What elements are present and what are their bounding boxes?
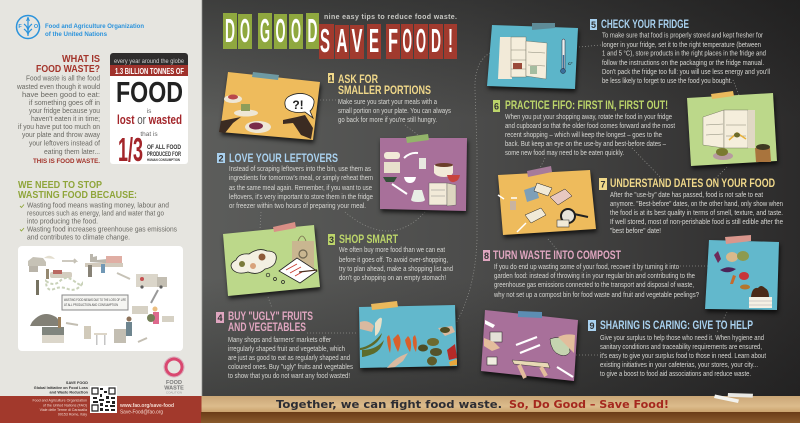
FAO logo and name: A (26, 17, 30, 23)
tip 3: don't go shopping on an empty stomach! (339, 275, 446, 282)
factory scene (85, 254, 130, 279)
FAO logo and name: of the United Nations (45, 31, 108, 38)
tip 4: Many shops and farmers' markets offer (228, 337, 332, 344)
tip 7: After the "use-by" date has passed, food is not safe to eat (610, 192, 763, 199)
bullet list: resources such as energy, land and water that go (27, 210, 164, 218)
heading: what is food waste: FOOD WASTE? (36, 64, 100, 75)
definition text: wasted even though it would (16, 84, 100, 91)
definition text: your plate and throw away (22, 132, 100, 139)
tip 1: SMALLER PORTIONS (338, 85, 431, 97)
tip 9: existing initiatives in your cafeterias, your stores, your city... (600, 362, 758, 369)
title: save food: A (336, 22, 348, 59)
message box: WASTING FOOD MEANS DUE TO THE LOSS OF LIFE (64, 298, 126, 302)
save food initiative text (34, 381, 89, 394)
shopping bag (292, 236, 314, 268)
save food initiative text: SAVE FOOD (66, 381, 88, 385)
definition text: eating them later... (44, 149, 100, 156)
open fridge (429, 183, 456, 206)
thermometer: C° (568, 61, 573, 66)
bullet list (20, 202, 177, 242)
bullet list: into producing the food. (27, 218, 98, 226)
definition text: haven't eaten it in time; (31, 116, 100, 123)
truck (136, 274, 167, 303)
tip 8: garden food: instead of throwing it in your regular bin and contributing to the (494, 273, 695, 280)
definition text: if something goes off in (29, 100, 100, 107)
tip 3: We often buy more food than we can eat (339, 247, 445, 254)
tip 2: or freezer within two hours of preparing your meal. (229, 203, 366, 210)
disposal scene (30, 314, 107, 345)
message box: AT ALL PRODUCTION AND CONSUMPTION (64, 303, 118, 307)
text: D (308, 12, 318, 49)
tip 2: LOVE YOUR LEFTOVERS (229, 153, 338, 165)
leftover items (383, 152, 460, 202)
tip 6: some new food may need to be eaten quickly. (505, 150, 624, 157)
hands (219, 115, 313, 139)
green heading: WASTING FOOD BECAUSE: (18, 190, 137, 201)
tip 2: Instead of scraping leftovers into the bin, use them as (229, 166, 371, 173)
tip 5: CHECK YOUR FRIDGE (601, 19, 689, 31)
tip 8: 8 (484, 251, 489, 261)
tip 7: 7 (600, 180, 606, 190)
tip 4: 4 (217, 313, 223, 323)
address: of the United Nations (FAO) (43, 404, 87, 408)
tip 9: SHARING IS CARING: GIVE TO HELP (600, 320, 753, 332)
title: do good (223, 12, 319, 49)
thought cloud (231, 250, 284, 284)
tip 2: 2 (218, 154, 224, 164)
statistic card: PRODUCED FOR (147, 152, 181, 158)
panel 3: shopping list (223, 222, 320, 296)
title: do good: D (225, 12, 235, 49)
FAO logo and name: F (18, 24, 22, 30)
open fridge (498, 37, 547, 79)
farm scene (28, 256, 82, 295)
wooden shelf (200, 396, 800, 423)
tip 9: Give your surplus to help those who need it. When hygiene and (600, 335, 764, 342)
panel 2: leftovers (380, 134, 467, 211)
panel 4: ugly vegetables (359, 301, 457, 368)
tip 8: TURN WASTE INTO COMPOST (493, 250, 621, 262)
address: Viale delle Terme di Caracalla (40, 408, 87, 412)
tip 5: longer in your fridge, set it to the right temperature (between (602, 42, 761, 49)
closing message: Together, we can fight food waste. (276, 398, 502, 411)
address (32, 398, 87, 416)
closing message: So, Do Good – Save Food! (509, 398, 669, 411)
labels and magnifier (498, 183, 588, 232)
heading: what is food waste (36, 54, 100, 75)
tip 6: and cupboard so that the older food comes forward and the most (505, 123, 675, 130)
green heading: WE NEED TO STOP (18, 180, 102, 191)
food chain illustration panel (18, 246, 183, 351)
statistic card: HUMAN CONSUMPTION (147, 158, 180, 162)
tip 5: 5 (591, 20, 596, 30)
definition text (16, 76, 100, 165)
title: save food: S (320, 22, 330, 59)
tip 6: PRACTICE FIFO: FIRST IN, FIRST OUT! (505, 100, 668, 112)
statistic card: 1/3 (118, 131, 143, 168)
bullet list: and contributes to climate change. (27, 234, 130, 242)
tip 8: why not set up a compost bin for food waste and fruit and vegetable peelings? (493, 292, 699, 299)
tip 3 (328, 234, 453, 282)
definition text: have been good to eat: (22, 92, 100, 99)
title: save food (319, 22, 457, 59)
sidebar background (0, 0, 201, 423)
save food initiative text: Global Initiative on Food Loss (34, 386, 88, 390)
address: 00153 Rome, Italy (58, 412, 87, 416)
definition text: your fridge because you (29, 108, 100, 115)
title: save food: O (416, 22, 426, 59)
title: save food: E (369, 22, 379, 59)
tip 4 (216, 311, 353, 380)
subtitle: nine easy tips to reduce food waste. (324, 14, 457, 21)
coalition logo: FOOD (166, 380, 182, 386)
vegetables (360, 318, 457, 368)
tip 5: follow the instructions on the packaging or the fridge manual. (602, 60, 764, 67)
panel 9: sharing food (481, 310, 578, 381)
plates (224, 94, 271, 133)
panel 6: FIFO fridge (687, 91, 777, 166)
contact: www.fao.org/save-food (119, 403, 174, 409)
tip 1: small portion on your plate. You can always (338, 108, 451, 115)
tip 7 (599, 178, 783, 235)
tip 6: 6 (494, 102, 499, 112)
tip 4: irregularly shaped fruit and vegetable, which (228, 346, 345, 353)
contact (119, 403, 174, 416)
footer band (0, 396, 201, 423)
title: save food: O (402, 22, 412, 59)
tip 5: be less likely to forget to use the food you bought. (602, 78, 732, 85)
notepad (279, 258, 317, 283)
tip 4: coloured ones. Buy "ugly" fruits and vegetables (228, 364, 353, 371)
connector dotted lines (260, 45, 739, 355)
statistic card: OF ALL FOOD (147, 144, 181, 151)
statistic card: FOOD (116, 77, 183, 109)
definition text: Food waste is all the food (26, 76, 100, 82)
address: Food and Agriculture Organization (32, 398, 87, 402)
tip 5 (590, 19, 770, 85)
food scraps and crate (714, 251, 772, 308)
statistic card: is (147, 108, 152, 115)
green heading (18, 180, 137, 201)
panel 5: fridge and thermometer (487, 23, 578, 89)
statistic card: 1.3 BILLION TONNES OF (115, 67, 184, 76)
tip 9 (588, 320, 766, 378)
statistic card (110, 53, 188, 168)
coalition logo: WASTE (164, 386, 184, 392)
tip 3: try to plan ahead, make a shopping list and (339, 266, 453, 273)
FAO logo and name (16, 16, 144, 38)
panel 1: plates and hands (219, 72, 320, 140)
tip 9: 9 (589, 321, 595, 331)
fridge with food (703, 110, 771, 162)
title: do good: G (260, 12, 270, 49)
title: save food: ! (448, 22, 453, 59)
tip 3: before it goes off. To avoid over-shopping, (339, 257, 448, 264)
title: save food: D (431, 22, 441, 59)
tip 1: ASK FOR (338, 74, 379, 86)
tip 4: AND VEGETABLES (228, 322, 306, 334)
tip 9: sanitary conditions and traceability requirements are ensured, (600, 344, 762, 351)
tip 9: to give a boost to food aid associations and reduce waste. (600, 371, 751, 378)
tip 6: recent shopping – which will keep the longest – goes to the (505, 132, 662, 139)
definition text: THIS IS FOOD WASTE. (33, 158, 100, 165)
title: do good: O (276, 12, 286, 49)
title: do good: O (240, 12, 250, 49)
title: save food: V (352, 22, 362, 59)
bullet list: Wasting food increases greenhouse gas emissions (27, 226, 177, 234)
tip 1 (328, 73, 451, 124)
tip 4: are just as good to eat as regularly shaped and (228, 355, 350, 362)
bullet list: Wasting food means wasting money, labour and (27, 202, 169, 210)
coalition logo: COALITION (166, 390, 182, 394)
tip 3: 3 (329, 235, 334, 245)
why stop wasting food (18, 180, 177, 242)
shop and people scene (114, 306, 174, 343)
QR code (90, 386, 117, 413)
tip 1: 1 (328, 74, 334, 84)
tip 5: To make sure that food is properly stored and kept fresher for (602, 32, 764, 40)
tip 6: back. But keep an eye on the use-by and best-before dates – (505, 141, 666, 148)
statistic card: every year around the globe (114, 58, 184, 65)
tip 5: Don't pack the fridge too full: you will use less energy and you'll (602, 69, 770, 76)
tip 2: ingredients for tomorrow's meal, or simply reheat them (229, 175, 373, 182)
tip 9: it's easy to give your surplus food to those in need. Learn about (600, 353, 766, 360)
tip 4: BUY "UGLY" FRUITS (228, 311, 313, 323)
statistic card: lost or wasted (117, 112, 182, 127)
tip 2: leftovers, it's very important to store them in the fridge (229, 194, 373, 201)
tip 8 (483, 250, 699, 299)
coalition logo (164, 357, 184, 394)
tip 3: SHOP SMART (339, 234, 398, 246)
statistic card: that is (140, 131, 158, 138)
panel 8: compost (705, 235, 779, 310)
speech bubble: ?! (292, 98, 304, 112)
tip 6 (493, 100, 675, 157)
contact: Save-Food@fao.org (120, 410, 163, 416)
tip 2: as the same meal again. Remember, if you want to use (229, 185, 372, 192)
title: save food: F (388, 22, 398, 59)
FAO logo and name: O (34, 24, 39, 30)
definition text: if you have put too much on (18, 124, 100, 131)
panel 7: date labels (498, 166, 596, 235)
tip 1: go back for more if you're still hungry. (338, 117, 437, 124)
tip 1: Make sure you start your meals with a (338, 99, 437, 106)
tip 4: to show that you do not want any food wasted! (228, 373, 350, 380)
title: do good: O (291, 12, 301, 49)
chalk pieces (714, 393, 753, 403)
chalkboard background (201, 0, 800, 396)
tip 5: 1 and 5 °C), store products in the right places in the fridge and (602, 50, 766, 58)
heading: what is food waste: WHAT IS (62, 54, 100, 65)
FAO logo and name: Food and Agriculture Organization (45, 23, 144, 30)
tip 2 (217, 153, 373, 210)
message box (62, 295, 128, 310)
tip 6: When you put your shopping away, rotate the food in your fridge (505, 114, 672, 121)
tip 8: If you do end up wasting some of your food, recover it by turning it into (494, 264, 679, 271)
arrows, hands and containers (484, 320, 575, 378)
save food initiative text: and Waste Reduction (50, 390, 89, 394)
what is food waste (16, 54, 100, 165)
tip 7: "best before" date! (610, 228, 661, 235)
definition text: your leftovers instead of (29, 140, 100, 148)
tip 8: greenhouse gas emissions connected to the transport and disposal of waste, (494, 282, 694, 289)
closing message (276, 398, 669, 411)
